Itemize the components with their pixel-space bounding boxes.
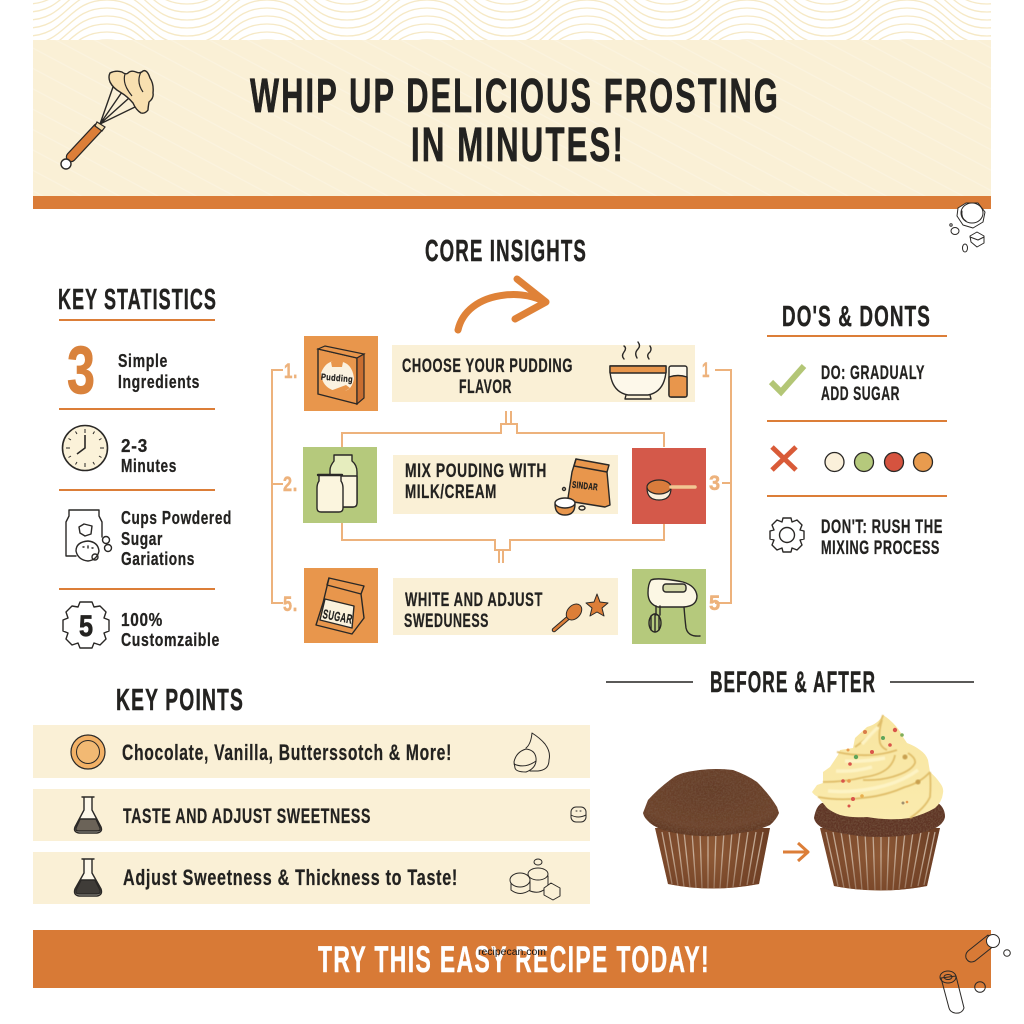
title: [250, 70, 780, 172]
key point: sweetness and thickness: Adjust Sweetness & Thickness to Taste!: [123, 865, 458, 890]
step numbers: 5: [709, 592, 721, 615]
stat: 3 simple ingredients: [67, 332, 200, 408]
heading: core insights: CORE INSIGHTS: [425, 233, 587, 268]
step numbers: [283, 359, 721, 616]
icon: doodle nut top right: [950, 203, 985, 252]
icon: sugar bag and bowl: SINDAR: [571, 480, 598, 493]
tile: sugar bag: [304, 568, 378, 643]
tile: pudding box: Pudding: [321, 372, 353, 384]
heading: do's and don'ts: DO'S & DONTS: [782, 301, 931, 333]
watermark: recipecan.com: [478, 947, 546, 958]
tile: hand mixer: [632, 569, 706, 644]
panel: do's and don'ts: [767, 301, 947, 559]
key point: taste and adjust: [33, 789, 590, 841]
don't: rush the mixing process: [770, 517, 943, 559]
arrow: curved process arrow: [458, 279, 546, 330]
step bar: mix pudding with milk: [393, 455, 618, 515]
don't: rush the mixing process: MIXING PROCESS: [821, 538, 940, 559]
tile: pudding box: [304, 336, 378, 411]
image: frosted cupcake: [812, 715, 945, 891]
stat: 100% customizable with gear icon: 5: [79, 610, 93, 643]
stat: 2-3 minutes with clock icon: Minutes: [121, 456, 177, 476]
step bar: white and adjust sweduness: [393, 578, 618, 635]
icon: whisk: [61, 71, 153, 169]
heading: key statistics: KEY STATISTICS: [58, 284, 217, 316]
stat: 3 simple ingredients: Ingredients: [118, 372, 200, 392]
tile: sugar bag: SUGAR: [322, 606, 354, 627]
stat: 2-3 minutes with clock icon: [62, 426, 177, 476]
step numbers: 1.: [284, 360, 298, 383]
header banner: [33, 40, 991, 209]
step bar: white and adjust sweduness: WHITE AND ADJUST: [405, 590, 543, 611]
icon: sugar bag and bowl: [555, 459, 610, 515]
step numbers: 3: [709, 472, 721, 495]
connector lines: [272, 370, 731, 603]
panel: before and after: [606, 666, 974, 891]
do: gradually add sugar: DO: GRADUALY: [821, 363, 925, 384]
panel: core insights flow: [272, 336, 731, 644]
icon: bowl and glass: [610, 342, 687, 399]
stat: 100% customizable with gear icon: [63, 602, 220, 650]
do: gradually add sugar: [771, 363, 925, 405]
step numbers: 1: [702, 359, 710, 382]
step bar: choose your pudding flavor: CHOOSE YOUR PUDDING: [402, 356, 573, 377]
panel: key points: [33, 682, 590, 904]
step bar: mix pudding with milk: MILK/CREAM: [405, 482, 497, 503]
stat: 2-3 minutes with clock icon: 2-3: [121, 436, 148, 456]
heading: key points: KEY POINTS: [116, 682, 244, 717]
icon: spoon and star: [554, 594, 608, 630]
step bar: choose your pudding flavor: [392, 342, 695, 402]
step bar: mix pudding with milk: MIX POUDING WITH: [405, 461, 547, 482]
image: plain muffin: [643, 769, 779, 889]
step bar: white and adjust sweduness: SWEDUNESS: [404, 611, 489, 632]
stat: 100% customizable with gear icon: Customzaible: [121, 630, 220, 650]
stat: cups powdered sugar with bag icon: Sugar: [121, 529, 163, 549]
decorative wave pattern strip: [33, 0, 991, 40]
stat: cups powdered sugar with bag icon: Cups Powdered: [121, 508, 232, 528]
heading: before and after: BEFORE & AFTER: [710, 666, 876, 699]
tile: milk bottles: [303, 447, 377, 523]
do: gradually add sugar: ADD SUGAR: [821, 384, 900, 405]
step numbers: 5.: [283, 593, 298, 616]
step bar: choose your pudding flavor: FLAVOR: [459, 377, 512, 398]
stat: cups powdered sugar with bag icon: Gariations: [121, 549, 195, 569]
key point: flavours: [33, 725, 590, 778]
footer call to action banner: [33, 930, 991, 988]
title: IN MINUTES!: [411, 119, 625, 172]
arrow: before to after: [783, 843, 808, 861]
don't marker with colour dots: [772, 447, 932, 472]
tile: measuring scoop: [632, 448, 706, 524]
key point: flavours: Chocolate, Vanilla, Butterssotch & More!: [122, 740, 452, 765]
step numbers: 2.: [283, 473, 298, 496]
key point: sweetness and thickness: [33, 852, 590, 904]
footer call to action banner: TRY THIS EASY RECIPE TODAY!: [318, 939, 710, 980]
stat: 3 simple ingredients: Simple: [118, 351, 168, 371]
stat: 3 simple ingredients: 3: [67, 332, 95, 408]
key point: taste and adjust: TASTE AND ADJUST SWEETNESS: [123, 805, 371, 828]
stat: cups powdered sugar with bag icon: [66, 508, 232, 569]
panel: key statistics: [58, 284, 232, 650]
stat: 100% customizable with gear icon: 100%: [121, 610, 163, 630]
don't: rush the mixing process: DON'T: RUSH THE: [821, 517, 943, 538]
icon: doodle rolling pins bottom right: [940, 934, 1010, 1013]
